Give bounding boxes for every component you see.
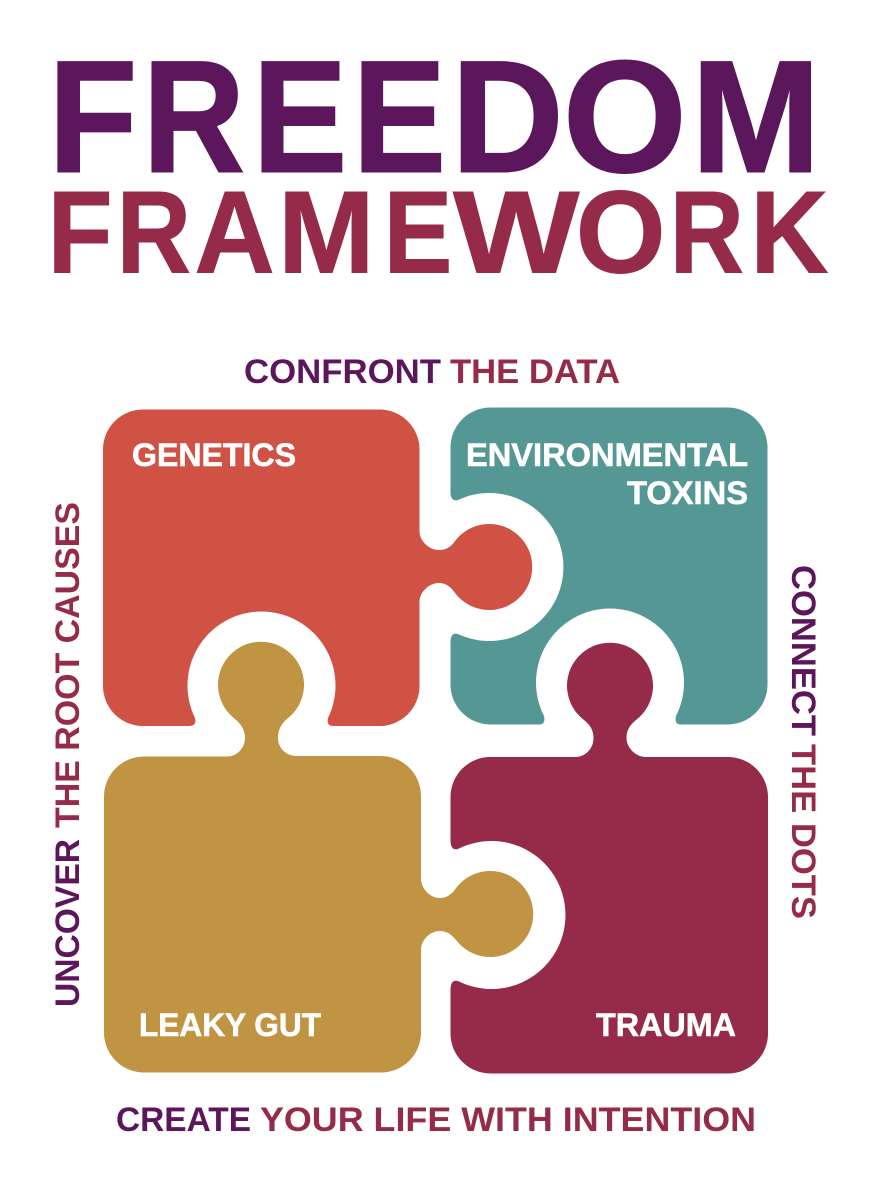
title line: FRAMEWORK: O [576,167,666,298]
title line: FRAMEWORK: E [384,167,452,298]
left label: uncover the root causes: UNCOVER [49,839,87,1007]
title line: FRAMEWORK: A [194,168,275,298]
title line: FRAMEWORK: W [453,166,580,298]
title line: FREEDOM: R [143,28,245,205]
label: environmental toxins [466,437,748,511]
title line: FRAMEWORK: K [750,167,828,297]
puzzle piece: genetics (red) [103,409,532,726]
label: genetics: GENETICS [132,437,296,473]
right label: connect the dots [784,565,822,919]
left label: uncover the root causes: THE ROOT CAUSES [49,502,87,828]
top label: confront the data [244,353,620,391]
title line: FREEDOM [49,27,820,206]
title line: FREEDOM: E [253,28,347,205]
title line: FREEDOM: D [451,29,564,206]
top label: confront the data: THE DATA [450,353,620,391]
label: trauma: TRAUMA [596,1007,736,1043]
title line: FREEDOM: M [691,29,820,206]
right label: connect the dots: CONNECT [784,565,822,736]
title line: FRAMEWORK: R [670,167,744,298]
title line: FREEDOM: F [49,28,137,206]
right label: connect the dots: THE DOTS [784,744,822,919]
puzzle piece: trauma (burgundy) [450,643,768,1074]
title line: FRAMEWORK: M [278,167,375,298]
title line: FRAMEWORK: R [117,167,191,298]
puzzle piece: environmental toxins (teal) [450,407,768,725]
top label: confront the data: CONFRONT [244,353,441,391]
label: environmental toxins: ENVIRONMENTAL [466,437,748,473]
title line: FREEDOM: E [353,28,446,206]
puzzle piece: leaky gut (gold) [104,642,533,1073]
title line: FRAMEWORK [48,166,828,298]
bottom label: create your life with intention: YOUR LIFE WITH INTENTION [260,1101,756,1139]
label: leaky gut: LEAKY GUT [139,1007,321,1043]
title line: FREEDOM: O [563,27,687,205]
label: environmental toxins: TOXINS [627,475,748,511]
title line: FRAMEWORK: F [48,167,113,298]
left label: uncover the root causes [49,502,87,1007]
bottom label: create your life with intention: CREATE [116,1101,251,1139]
